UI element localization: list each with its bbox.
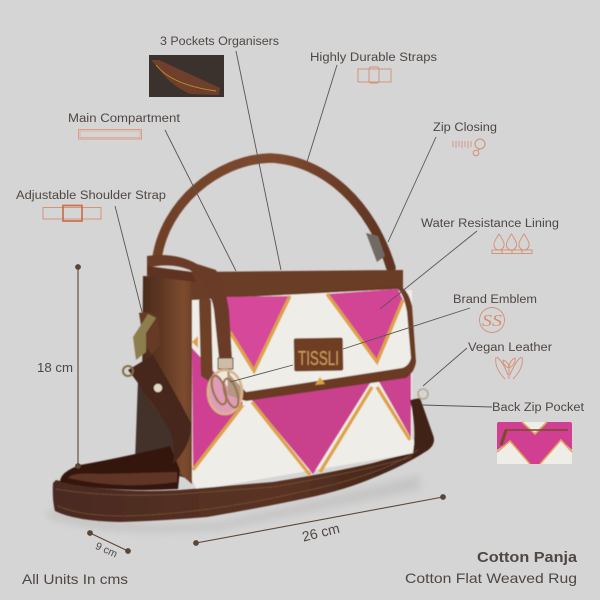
flap trim xyxy=(225,286,416,401)
coil inner xyxy=(68,472,177,485)
icon: compartment xyxy=(78,130,142,139)
front panel base xyxy=(192,290,420,490)
line: pockets xyxy=(236,51,281,270)
strap stitching xyxy=(56,450,418,516)
icon: emblem xyxy=(480,308,504,332)
dimension: 9 cm: 9 cm xyxy=(93,540,119,560)
zip pull xyxy=(501,430,506,445)
right flap pink triangle xyxy=(327,289,403,362)
dimension lines xyxy=(76,265,445,553)
zip closing tab xyxy=(366,233,385,262)
side panel xyxy=(142,276,198,484)
handle xyxy=(157,158,391,268)
pocket photo xyxy=(149,55,224,97)
ground shadow xyxy=(48,475,420,532)
flap white xyxy=(225,289,411,392)
inner vertical strap xyxy=(199,297,213,384)
left flap pink triangle xyxy=(226,296,290,369)
icon: hands xyxy=(496,357,522,379)
lining xyxy=(149,55,224,97)
left white strip with gold xyxy=(192,300,218,370)
shoulder strap xyxy=(128,355,191,464)
top band xyxy=(192,270,403,300)
label: adjustable strap: Adjustable Shoulder Strap xyxy=(16,190,166,202)
label: zip closing: Zip Closing xyxy=(433,122,497,134)
width dimension xyxy=(194,495,445,545)
lower gold chevrons xyxy=(193,387,410,475)
patch text: TISSLI xyxy=(298,348,339,370)
leader lines xyxy=(115,51,492,407)
line: vegan leather xyxy=(423,348,467,386)
ring tab xyxy=(218,358,233,369)
pink fabric xyxy=(497,422,572,464)
label: vegan leather: Vegan Leather xyxy=(468,342,552,354)
clasp brass xyxy=(133,314,156,360)
inner loops xyxy=(209,374,229,406)
pocket slit xyxy=(156,65,216,91)
icon: adjustable strap xyxy=(43,206,101,221)
flap xyxy=(225,286,416,401)
label: brand emblem: Brand Emblem xyxy=(453,294,537,306)
zip line xyxy=(505,429,568,431)
line: main compartment xyxy=(165,130,236,271)
label: main compartment: Main Compartment xyxy=(68,113,181,125)
leather pocket xyxy=(151,60,220,95)
icon: water drops xyxy=(492,234,532,254)
icon: emblem: SS xyxy=(482,311,503,330)
line: back zip xyxy=(422,405,492,407)
product material: Cotton Flat Weaved Rug xyxy=(405,570,577,586)
big lower pink triangle xyxy=(250,380,372,474)
small gold mark xyxy=(315,377,325,385)
label: water lining: Water Resistance Lining xyxy=(421,218,559,230)
product name: Cotton Panja xyxy=(477,549,578,566)
flap gold lines xyxy=(230,294,403,371)
icon: straps xyxy=(358,67,391,83)
line: durable straps xyxy=(307,65,337,162)
line: zip xyxy=(388,137,436,242)
second strap tab xyxy=(147,266,196,282)
note: units: All Units In cms xyxy=(22,571,128,587)
label: 3 pockets: 3 Pockets Organisers xyxy=(160,36,279,48)
line: adjustable strap xyxy=(115,206,142,312)
clasp tab xyxy=(139,312,160,354)
back pocket photo xyxy=(497,422,572,464)
label: durable straps: Highly Durable Straps xyxy=(310,52,437,64)
lower dark side of bag xyxy=(135,380,192,480)
small gold side mark xyxy=(192,336,198,348)
strap rivet xyxy=(154,384,162,392)
left pink panel xyxy=(192,348,243,470)
icon: zip xyxy=(453,139,485,156)
bag photo xyxy=(53,158,434,522)
brand patch xyxy=(294,338,343,371)
shoulder clasp xyxy=(123,312,160,376)
gold chevrons xyxy=(497,422,572,464)
depth dimension xyxy=(88,531,130,553)
dimension: 18 cm: 18 cm xyxy=(37,360,73,375)
outer strap tab xyxy=(147,255,232,358)
height dimension xyxy=(76,265,80,468)
emblem ring xyxy=(208,358,242,414)
label: back zip: Back Zip Pocket xyxy=(492,402,585,414)
right side hardware xyxy=(418,389,428,399)
dimension: 26 cm: 26 cm xyxy=(300,520,341,545)
long strap band xyxy=(53,398,434,522)
line: emblem xyxy=(230,308,470,382)
line: water lining xyxy=(380,231,477,309)
coil of strap xyxy=(60,446,180,490)
ring xyxy=(208,370,242,414)
clasp ring xyxy=(123,366,133,376)
patch leather xyxy=(294,338,343,371)
white triangles xyxy=(497,422,572,464)
right lower pink triangle xyxy=(378,372,411,438)
